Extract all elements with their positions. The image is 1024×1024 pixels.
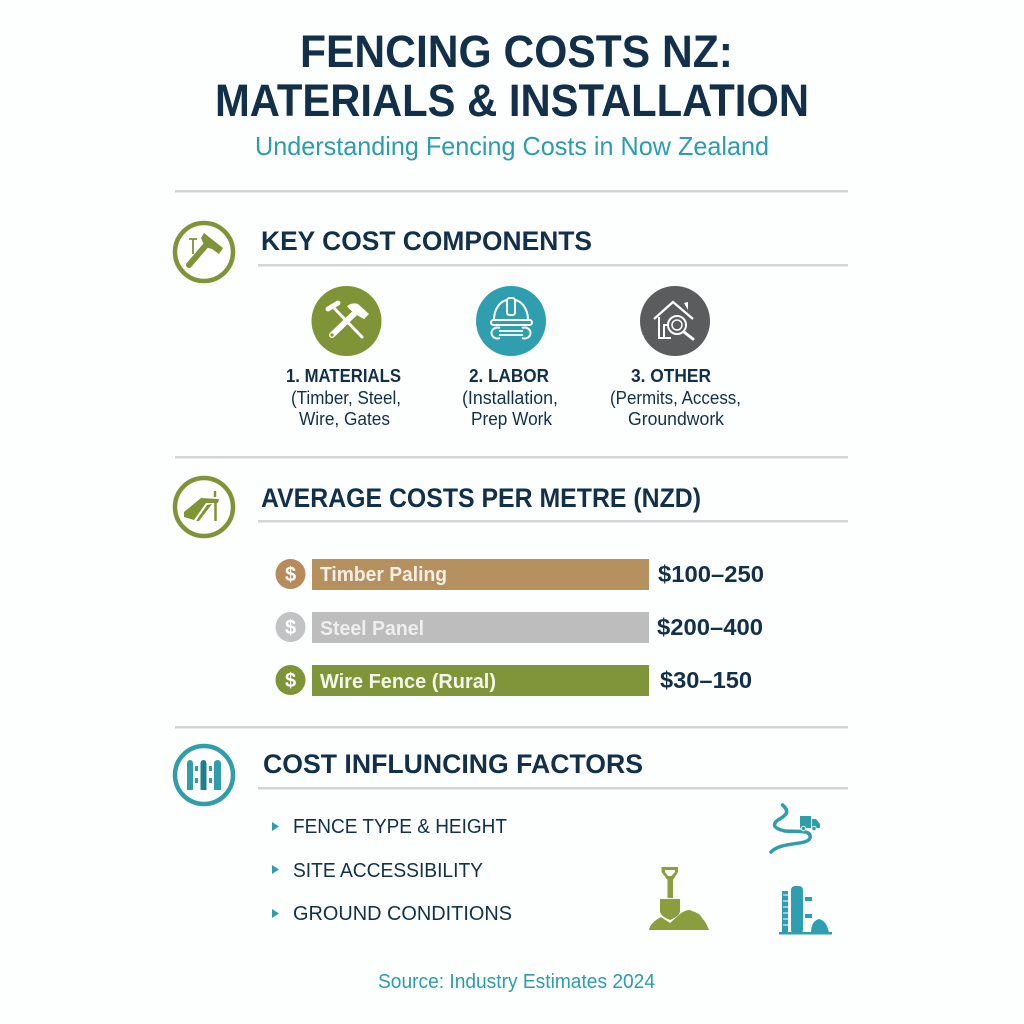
icon: crossed hammer and nail <box>312 286 382 356</box>
list item: ground conditions: GROUND CONDITIONS <box>293 903 512 925</box>
icon: timber and post badge <box>175 478 233 536</box>
icon: ground gauge and mound <box>779 886 832 934</box>
bar row: wire fence: Wire Fence (Rural) <box>320 671 496 693</box>
icon: fence badge <box>175 746 233 804</box>
heading: average costs per metre: AVERAGE COSTS PER METRE (NZD) <box>261 483 701 513</box>
item: materials <box>286 286 401 429</box>
bar row: steel panel: $200–400 <box>657 614 763 640</box>
bar row: timber paling: Timber Paling <box>320 564 447 586</box>
text: materials label: 1. MATERIALS <box>286 366 401 386</box>
panel: key cost components <box>175 223 848 429</box>
item: labor <box>462 286 558 429</box>
title <box>215 26 809 126</box>
bar row: steel panel: $ <box>285 617 296 639</box>
bar row: steel panel: Steel Panel <box>320 618 424 640</box>
icon: shovel in soil <box>649 867 709 930</box>
text: other label: (Permits, Access, <box>610 388 741 408</box>
bar row: wire fence: $30–150 <box>660 667 752 693</box>
subtitle: Understanding Fencing Costs in Now Zealand <box>255 131 769 161</box>
text: materials label: (Timber, Steel, <box>291 388 401 408</box>
item: other <box>610 286 741 429</box>
icon: hard hat and wrench <box>476 286 546 356</box>
bar row: wire fence <box>276 665 752 696</box>
bar row: timber paling: $100–250 <box>658 561 764 587</box>
bar row: timber paling: $ <box>285 564 296 586</box>
icon: winding road and truck <box>771 805 820 852</box>
heading: key cost components: KEY COST COMPONENTS <box>261 226 592 256</box>
text: other label: Groundwork <box>628 409 725 429</box>
heading: cost influencing factors: COST INFLUNCING FACTORS <box>263 749 643 779</box>
bar row: wire fence: $ <box>285 670 296 692</box>
list item: fence type and height: FENCE TYPE & HEIGHT <box>293 816 507 838</box>
text: labor label: Prep Work <box>471 409 553 429</box>
text: materials label <box>286 366 401 429</box>
text: other label <box>610 366 741 429</box>
text: labor label <box>462 366 558 429</box>
bar row: steel panel <box>276 612 763 643</box>
text: labor label: (Installation, <box>462 388 558 408</box>
panel: average costs per metre <box>175 478 848 696</box>
source note: Source: Industry Estimates 2024 <box>378 971 655 993</box>
icon: hammer and nail badge <box>175 223 233 281</box>
text: materials label: Wire, Gates <box>299 409 390 429</box>
panel: cost influencing factors <box>175 746 848 934</box>
text: other label: 3. OTHER <box>631 366 711 386</box>
text: labor label: 2. LABOR <box>469 366 549 386</box>
list item: site accessibility: SITE ACCESSIBILITY <box>293 860 483 882</box>
title: FENCING COSTS NZ: <box>300 26 733 77</box>
bar row: timber paling <box>276 559 764 590</box>
title: MATERIALS & INSTALLATION <box>215 75 809 126</box>
icon: house with magnifier <box>640 286 710 356</box>
